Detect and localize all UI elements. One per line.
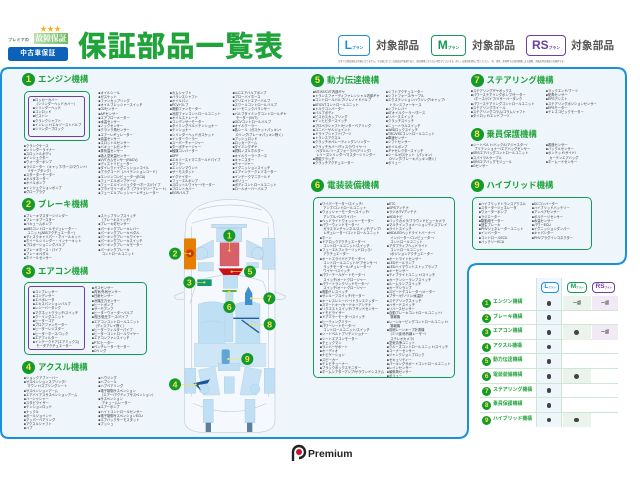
badge L — [338, 35, 370, 56]
part: seats and cabin — [185, 276, 274, 423]
numbered markers: 5 — [248, 267, 253, 277]
row 9: ハイブリッド機構 — [493, 417, 532, 422]
section 8: occupant protection — [471, 128, 578, 168]
part: transmission — [218, 268, 243, 275]
heading: brake — [22, 198, 88, 211]
heading: air conditioning — [22, 265, 88, 278]
RS plan box: engine — [28, 96, 85, 137]
list: hybrid right: ■DCコンバーター ■ハイブリッドバッテリー ■アンペアセンサー ■ボルテージセンサー ■水温センサー ■パワーECU ■イグニッションダンパー ■キャパシター ■PHVプラグインコネクター — [532, 202, 573, 240]
list: engine RS parts: ■ロッカーカバー （シリンダーヘッドカバー） ■シリンダーヘッド ■コンロッド ■ピストン ■クランクシャフト ■インレット/エキゾーストバルブ ■シリンダーブロック — [33, 98, 81, 131]
row 1: 1 — [485, 300, 488, 307]
heading: steering: ステアリング機構 — [486, 75, 554, 85]
part: air conditioning — [197, 279, 212, 286]
section 2: brake — [22, 198, 143, 260]
numbered markers: 9 — [245, 354, 250, 364]
list: engine column 2: ■オイルシール ■ガスケット ■ファンカップリング ■オイルプレッシャースイッチ ■O2センサー ■A/Fセンサー ■エアフローメーター ■水温センサー ■ノックセンサー ■クランク角センサー ■エアーレギュレーター ■油温センサー ■スロットルセンサー ■バキュームセンサー ■排気温センサー ■吸入空気温センサー ■VVTカムセンサー(RACV) ■ディストリビューター ■ダイレクトイグニッションコイル ■プラグコード（ハイテンションコード） ■エンジンコンピューター(ECU) ■フューエルポンプゲージ ■フューエルインジェクター/ホース/パイプ ■プライマリーポンプ（プライマリープレート） ■フューエルプレッシャーレギュレーター — [98, 91, 168, 195]
section 3: air conditioning — [22, 265, 147, 355]
list: steering right: ■ラックエンド/ブーツ ■舵角センサー ■EPSアシスト ■ステアリングポジションセンサー ■EPSモーター ■テレスコピックモーター — [546, 89, 597, 114]
row 9 — [482, 413, 591, 427]
numbered markers: 4 — [173, 379, 178, 389]
heading: engine — [22, 73, 88, 86]
numbered markers: 2 — [173, 249, 178, 259]
row 5 — [480, 354, 618, 369]
M plan box: electrical — [313, 197, 455, 378]
list: occupant protection right: ■着座センサー ■バックルセンサー ■ポンテッド/サイド/ カーテンエアバッグ ■ホームードセンサー — [546, 143, 578, 164]
row 3 — [480, 325, 618, 340]
label RS: 対象部品 — [571, 40, 614, 52]
heading: axle: アクスル機構 — [38, 362, 88, 372]
heading: electrical: 電装装備機構 — [327, 180, 379, 190]
heading: steering — [471, 74, 554, 87]
numbered markers: 1 — [227, 231, 232, 241]
heading: axle — [22, 361, 88, 374]
M plan box: hybrid — [472, 197, 592, 250]
row 1: 一部 — [601, 300, 609, 305]
badge M — [431, 35, 466, 56]
header: M plan: Mプラン — [571, 282, 583, 290]
row 2: ブレーキ機構 — [493, 315, 522, 320]
row 2: 2 — [485, 315, 488, 322]
legal note: ※全ての保証部品が対象となりません。※記載されている部品は代表例であり、保証適用とならない場合がございます。詳しくは保証約款をご覧ください。 尚、車両、車体等での外的要因による故障、消耗品等は保証の対象外です。 — [338, 61, 566, 63]
row 3: 3 — [485, 329, 488, 336]
heading: engine: エンジン機構 — [38, 74, 88, 84]
section 1: engine — [22, 73, 287, 195]
numbered markers: 6 — [227, 302, 232, 312]
row 3: エアコン機構 — [493, 329, 522, 334]
list: occupant protection left: ■シートベルト/バックル/アジャスター/ プリテンショナー/エアバッグセンサー ■SRSエアバッグコントロールユニット ■スパイラルケーブル ■SRSエアバッグモジュール ■Gセンサー — [471, 143, 530, 168]
list: engine column 4: ■LLCエアバルブポンプ ■ブローバイホース ■クリエイトエアーバルブ ■スワールコントロールバルブ ■ハーモニックバランサー ■バルブタイミングコントロールギヤ モーター(VVT) ■OCVコントロールバルブ ■オイルクーラー ■各シール（ガスケットパッキン/ Oリング/ブレーキパッキン除く） ■プッシュロッド ■ロッカーアーム ■タイミングギヤ ■燃料ノズルホルダー ■オイルクーラーホース ■キャニスター ■チャージャー ■イグニッションスイッチ ■エアインテークレゾネーター ■インテークマニホールド ■ボリュー ■ボディコントロールユニット ■ロールオーバーバルブ — [233, 91, 287, 191]
part: axle — [193, 379, 210, 391]
heading: hybrid — [471, 179, 554, 192]
list: engine column 3: ■カムシャフト ■バランスシャフト ■オイルパン ■PCVバルブ ■電動ファンモーター ■冷却ファンコントロールユニット ■オイルストレーナ ■コンデンサーモーター ■タイミングベルトテンショナー ■テンショナー ■シリンダーヘッドガスケット ■インタークーラー ■スーパーチャージャー ■ターボチャージャー ■触媒コンバーター ■DPF ■エキゾーストマニホールドパイプ ■マフラー ■エンジンマウント ■サーモスタット ■イグナイター ■フューエルポンプ ■スロットルワイヤー/モーター ■フロントカバー ■EGRバルブ — [170, 91, 221, 195]
heading: brake: 2 — [26, 199, 31, 210]
list: engine M parts: ■クランクケース ■シリンダーライナー ■スロットルボディ ■インジェクター ■ウォーターポンプ ■ラジエーター（キャップ/ホース/マウント/ リザーブタンク） ■スターターモーター ■オルタネーター ■オイルポンプ ■インジェクションポンプ ■グロープラグ — [24, 144, 87, 194]
heading: hybrid: 9 — [474, 180, 480, 191]
heading: hybrid: ハイブリッド機構 — [486, 180, 553, 190]
logo mark — [292, 444, 306, 461]
list: air conditioning RS parts: ■コンプレッサー ■コンデンサー ■エバポレータ ■エキスパンションバルブ ■レシーバータンク ■マグネットクラッチ/スイッチ ■クーリングユニット ■ヒーターコア ■プロアファンモーター ■ヒーターレジスター ■ヒーターホース/コック ■エアフィルター ■インテークドア(エアミックス) モータアクチュエーター — [33, 290, 79, 348]
heading: occupant protection: 8 — [474, 129, 480, 140]
row 5: 5 — [485, 358, 488, 365]
list: brake left: ■ブレーキマスターシリンダー ■ブレーキブースター ■バキュームポンプ ■ABSコントロールモジュレーター・ ユニット(ABSアクチュエーター) ■ディスクキャリパー・ホイールキット ■ホイールシリンダー・インナーキット ■プロポーショニングバルブ ■ブレーキホース・パイプ ■ブレーキペダル ■ホイールセンサー — [24, 214, 81, 260]
legend: M plan — [431, 35, 515, 56]
heading: air conditioning: 3 — [26, 266, 31, 277]
badge M: Mプラン — [438, 38, 459, 52]
M plan box: engine — [24, 91, 90, 141]
part: hybrid — [222, 349, 230, 364]
numbered markers: 7 — [267, 293, 272, 303]
row 4 — [480, 340, 618, 354]
logo wordmark: Premium — [308, 449, 352, 460]
heading: axle: 4 — [26, 362, 31, 373]
badge RS: RSプラン — [532, 38, 560, 52]
section 5: drivetrain — [311, 74, 445, 165]
row 6: 電装装備機構 — [493, 373, 522, 378]
list: drivetrain right: ■シフトアクチュエーター ■シフトフォース/ケーブル ■エクステンションハウジング/キャップ/ トランスファーケース ■シフトレバー ■ATオイルクーラー/ホース ■リバーススイッチ ■クラッチスイッチ ■ニュートラルスイッチ ■4WDロックスイッチ ■TRC/VSCコントロールユニット ■車速センサー ■シフトセンサー ■オイルポンプ ■ギヤセレクタースイッチ ■シール/ガスケット（パッキン/ Oリング/ブレーキパッキン除く） ■ボリュー — [386, 90, 445, 165]
table: coverage by plan — [480, 278, 618, 427]
heading: air conditioning: エアコン機構 — [38, 266, 88, 276]
list: electrical right: ■ETC ■GPSアンテナ ■ラジオ/TVアンテナ ■HDDナビ ■バックカメラ/ブラウンドビューカメラ ■マルチインフォメーションディスプレイ ■ライトスイッチ ■HID/LEDヘッドライトバーナー/ インバーター/コンピューター/ コントロールユニット ■アダプティブヘッドライト コントロールユニット /ポジションアクチュエーター ■オートライトセンサー ■LEDテールランプ ■LEDハイマウントストップランプ ■キーセンサー ■ティブライトユニット/スイッチ ■カーテンシーランプスイッチ ■ルームランプスイッチ ■カーテシランプ ■スピードデコレーター/メーター ■ブザー/ガソリン/水温計 ■ステアリングスイッチ ■ハザードスイッチ ■リバースセンサー ■自動ブレーキコントロールユニット/ 警報機 ■レーンキーピングコントロールユニット/ 警報機 ■前側レーンキープ計測機 （ミリ波/赤外線レーザー/ ステレオカメラ） ■空気清浄ユニット ■クルーズコントロールユニット/スイッチ ■コーナーセンサー ■ジャンクションブロック ■セキュリティー ■パーキングサポートコントロールユニット ■レインセンサー ■傾斜角センサー ■ボリュー — [387, 202, 451, 378]
logo: Premium — [292, 444, 352, 461]
used car warranty pill: 中古車保証 — [20, 50, 56, 57]
engine bay parts — [196, 224, 275, 271]
header: L plan — [541, 282, 559, 292]
badge RS — [526, 35, 566, 56]
list: axle right: ■ハウジング ■ハブシール ■ハブベアリング ■電子制御サスペンション （エアー/アクティブサスペンション） ■サスペンション アキュームレーター ■エアーポンプ ■ハイトコントロールセンサー ■電子制御サスペンションECU ■エアバックサーモスタット ■ブッシュ — [98, 376, 155, 426]
part: engine — [220, 243, 239, 266]
header: RS plan — [592, 282, 615, 292]
list: axle left: ■ショックアブソーバー ■サスペンションスプリング/ マウント/スプリングシート ■サスペンションアーム ■エアバイアスサスペンションアーム ■ハーシャシャー ■スタビライザー ■テンションロッド ■ナックル ■ボールジョイント ■アッパーベアリング ■アクスルシャフト ■ハブ — [24, 376, 77, 430]
row 5: 動力伝達機構 — [493, 358, 522, 363]
RS plan box: air conditioning — [28, 286, 85, 350]
header: L plan: Lプラン — [544, 282, 556, 290]
car diagram — [169, 199, 286, 433]
list: steering left: ■ステアリングギヤボックス ■パワーステアリングポンプ/モーター /ホース/パイプ/リザーバータンク ■パワーステアリングコントロールユニット ■ステアリングホイール ■ステアリングコラム/コラムシャフト ■タイロッド/エンドブーツ — [471, 89, 535, 118]
part: exhaust ends — [206, 423, 252, 432]
row 6: 6 — [485, 373, 488, 380]
logo: premium warranty badge — [8, 26, 68, 61]
part: steering — [245, 287, 252, 305]
brand caption: プレミアの — [8, 36, 29, 42]
list: hybrid left: ■ハイブリッドトランスアクスル ■スタータージェネレータ ■ウォーターポンプ ■ラジエーター ■駆動用モーター ■回生ブレーキ ■PHVジェネレーターユニット ■インバーター ■コントロールECU ■バッテリーECU — [479, 202, 526, 244]
row 4: アクスル機構 — [493, 344, 522, 349]
heading: occupant protection: 乗員保護機構 — [486, 129, 537, 139]
heading: brake: ブレーキ機構 — [38, 199, 88, 209]
label L: 対象部品 — [376, 40, 419, 52]
row 1: 一部 — [573, 300, 581, 305]
legend: L plan — [338, 35, 419, 56]
section 6: electrical — [311, 179, 455, 378]
table column tints — [536, 278, 562, 427]
list: drivetrain left: ■MT/AT/CVT内部ギヤ ■トランスファーディファレンシャル内部ギヤ ■コントロールバルブ/ソレノイドバルブ ■AT/CVTコントロールユニット ■トルクコンバーター ■バルブボディ ■ビスカスカップリング ■インヒビタースイッチ ■プロペラシャフト/センターベアリング ■ユニバーサルジョイント ■ドライブシャフト/ブーツ ■トランスアクスル ■クラッチオペレーティングシリンダー ■クラッチカバー/ディスク/ワイヤー/ ペダル/レリーズフォーク/ベアリング/ レリーズシリンダー/マスターシリンダー ■電磁クラッチ ■クラッチアクチュエーター — [313, 90, 380, 165]
list: brake right: ■ストップランプスイッチ （ブレーキスイッチ） ■ブレーキ灯センサー ■パーキングブレーキレバー ■パーキングブレーキペダル ■パーキングブレーキワイヤー ■パーキングブレーキスイッチ ■パーキングブレーキモーター ■パーキングブレーキ コントロールユニット — [98, 214, 143, 256]
numbered markers: 8 — [267, 319, 272, 329]
numbered markers: 3 — [187, 277, 192, 287]
header: M plan — [567, 282, 587, 292]
heading: drivetrain: 5 — [315, 75, 320, 86]
row 7 — [480, 384, 618, 398]
rating stars: ★★★ — [40, 26, 61, 33]
heading: occupant protection — [471, 128, 537, 141]
heading: steering: 7 — [474, 75, 480, 86]
part: seat belts — [233, 318, 259, 333]
part: propeller shaft — [222, 290, 237, 292]
legend: RS plan — [526, 35, 614, 56]
row 8: 乗員保護機構 — [493, 402, 522, 407]
car body outline — [174, 199, 286, 432]
row 1: エンジン機構 — [493, 300, 522, 305]
numbered markers — [169, 230, 276, 390]
row 8 — [480, 398, 618, 413]
section 9: hybrid — [471, 179, 592, 250]
header: RS plan: RSプラン — [596, 282, 612, 290]
title: 保証部品一覧表 — [78, 31, 284, 63]
M plan box: air conditioning — [24, 282, 146, 355]
label M: 対象部品 — [472, 40, 515, 52]
row 8: 8 — [485, 402, 488, 409]
row 4: 4 — [485, 344, 488, 351]
leader lines — [181, 242, 264, 385]
badge L: Lプラン — [345, 38, 363, 52]
row 2 — [480, 311, 618, 325]
heading: electrical — [311, 179, 379, 192]
row 3: 一部 — [601, 329, 609, 334]
heading: electrical: 6 — [315, 180, 320, 191]
warranty mark: 故障保証 — [35, 34, 67, 43]
list: electrical left: ■ワイパーモーター/スイッチ/ アンプ/コントロールユニット ■ウォッシャーモーター/スイッチ/ アンプ/レベルワイパー ■ヘッドライトウォッシャーモーター ■パワーウィンドモーター/ ガラスランチャンネル/スイッチ/アンプ/ レギュレーター/コントロールユニット ■ホーン ■ドアロックアクチュエーター/ コントロールユニット/スイッチ ■フューエルフィラーリッドロック/ アクチュエーター ■オートスライドドアモーター/ コントロールユニット/ドアセンサー/ ラッチモーター/レギュレーター/ ワイヤー/スイッチ ■パワーテールゲートモーター/ スイッチ/オートクロージャー ■パワートランクリッドモーター/ スイッチ/オートクロージャー ■電動テレスイッチ ■サンルーフスイッチ/モーター ■キーレスレシーバー/トランスミッター ■スマートキー/カードキーアンテナ ■リクエストスイッチ/ブザッドセンサー ■イモビライザー ■ドアミラーモーター/スイッチ ■ヒーティングミラー ■パワーシートモーター/ コントロールユニット/スイッチ ■シートベルトプリテンショナー ■シートエアコンモーター ■チェックマン ■ランバーサポート ■オーディオ ■ナビゲーション ■スピーカー ■テレビチューナー ■ブラックボックスモニター ■ホームシアターアンプ/サラウンドシステム — [320, 202, 384, 374]
heading: drivetrain — [311, 74, 379, 87]
row 9: 9 — [485, 417, 488, 424]
row 6 — [480, 369, 618, 384]
section 4: axle — [22, 361, 155, 430]
heading: engine: 1 — [26, 74, 31, 85]
row 7: ステアリング機構 — [493, 388, 532, 393]
part: brake — [184, 238, 196, 269]
section 7: steering — [471, 74, 597, 118]
row 1 — [480, 296, 618, 311]
list: air conditioning M parts: ■ガスセンサー ■内気/外気センサー ■日射センサー ■冷媒圧力センサー ■ヒートポンプ ■サーモアンプ ■ヒーターウォーターバルブ ■高圧/低圧ホース/パイプ ■エアコンコントロールユニット （ディスプレイ除く） ■ヒーターフィルターパイプ ■ヒーターコントロールワイヤー ■エアコンファンスイッチ ■PTCヒーター ■ベンチレーターモーター ■Oリング — [92, 286, 139, 353]
heading: drivetrain: 動力伝達機構 — [327, 75, 379, 85]
used car warranty pill — [8, 47, 68, 61]
row 7: 7 — [485, 388, 488, 395]
